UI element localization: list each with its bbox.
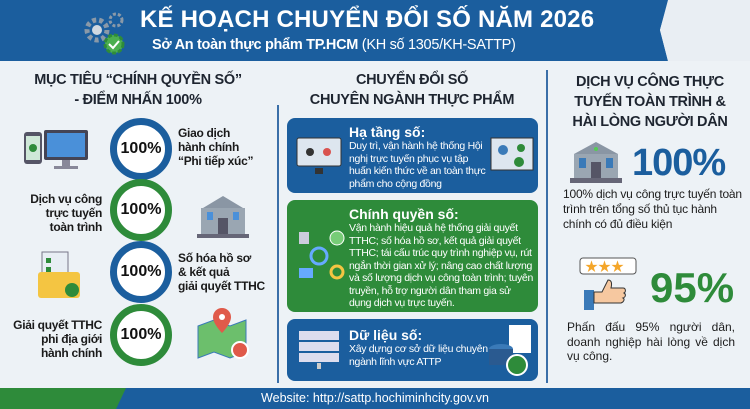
heading right (572, 72, 728, 130)
circle 4: 100% (121, 326, 161, 343)
box: Dữ liệu số (287, 319, 538, 381)
heading left (34, 70, 242, 108)
heading middle: CHUYỂN ĐỔI SỐ (356, 72, 468, 88)
panel: left goals (13, 70, 265, 366)
heading middle (310, 70, 514, 108)
circle 2: 100% (121, 201, 161, 218)
panel: left goals: trực tuyến (46, 206, 102, 220)
panel: left goals: Giải quyết TTHC (13, 318, 102, 332)
stat 95%: 95% (650, 264, 734, 311)
box: Hạ tầng số (287, 118, 538, 193)
panel: right (563, 72, 742, 363)
circle 3: 100% (121, 263, 161, 280)
stat 100%: 100% (632, 142, 725, 184)
icon: building right (570, 142, 622, 183)
circle 3 (110, 241, 172, 303)
panel: left goals: “Phi tiếp xúc” (178, 154, 253, 168)
icon: building (197, 196, 249, 238)
website text: Website: http://sattp.hochiminhcity.gov.vn (261, 391, 489, 405)
header banner (0, 0, 668, 61)
box: Hạ tầng số: Hạ tầng số: (349, 124, 425, 140)
panel: left goals: Số hóa hồ sơ (178, 251, 251, 265)
circle 2 (110, 179, 172, 241)
heading right: TUYẾN TOÀN TRÌNH & (574, 94, 726, 110)
heading right: DỊCH VỤ CÔNG THỰC (576, 74, 724, 90)
icon: gears (84, 12, 124, 54)
title: KẾ HOẠCH CHUYỂN ĐỔI SỐ NĂM 2026 (140, 6, 594, 33)
panel: left goals: hành chính (41, 346, 102, 360)
icon: map (198, 308, 249, 359)
heading left: - ĐIỂM NHẤN 100% (74, 92, 202, 108)
text 95%: Phấn đấu 95% người dân, doanh nghiệp hài lòng về dịch vụ công. (567, 320, 735, 363)
divider lines (277, 105, 278, 383)
box: Chính quyền số: Chính quyền số: (349, 206, 459, 222)
icon: thumbs up stars: ★★★ (585, 259, 624, 274)
box: Chính quyền số (287, 200, 538, 312)
text 100%: 100% dịch vụ công trực tuyến toàn trình trên tổng số thủ tục hành chính có đủ điều kiện (563, 187, 742, 231)
panel: left goals: Dịch vụ công (30, 192, 102, 206)
subtitle: Sở An toàn thực phẩm TP.HCM (KH số 1305/KH-SATTP) (152, 37, 516, 53)
panel: left goals: phi địa giới (41, 332, 102, 346)
circle 4 (110, 304, 172, 366)
panel: left goals: Giao dịch (178, 126, 230, 140)
panel: middle (310, 70, 514, 108)
footer (0, 388, 750, 409)
panel: left goals: toàn trình (50, 220, 102, 234)
box: Hạ tầng số: Duy trì, vận hành hệ thống Hội nghị trực tuyến phục vụ tập huấn kiến thức về an toàn thực phẩm cho cộng đồng (349, 140, 485, 190)
box: Chính quyền số: Vận hành hiệu quả hệ thống giải quyết TTHC; số hóa hồ sơ, kết quả giải quyết TTHC; tái cấu trúc quy trình nghiệp vụ, rút ngắn thời gian xử lý; nâng cao chất lượng và số lượng dịch vụ công toàn trình; tuyên truyền, hỗ trợ người dân tham gia sử dụng dịch vụ trực tuyến. (349, 222, 533, 309)
heading right: HÀI LÒNG NGƯỜI DÂN (572, 114, 728, 130)
icon: thumbs up stars (580, 258, 636, 310)
icon: folder (38, 252, 80, 298)
box: Dữ liệu số: Xây dựng cơ sở dữ liệu chuyên ngành lĩnh vực ATTP (349, 343, 488, 368)
circle 1: 100% (121, 140, 161, 157)
panel: left goals: hành chính (178, 140, 239, 154)
panel: left goals: giải quyết TTHC (178, 279, 265, 293)
heading middle: CHUYÊN NGÀNH THỰC PHẨM (310, 92, 514, 108)
heading left: MỤC TIÊU “CHÍNH QUYỀN SỐ” (34, 72, 242, 88)
circle 1 (110, 118, 172, 180)
icon: phone & monitor (24, 130, 88, 169)
panel: left goals: & kết quả (178, 265, 229, 279)
box: Dữ liệu số: Dữ liệu số: (349, 327, 422, 343)
